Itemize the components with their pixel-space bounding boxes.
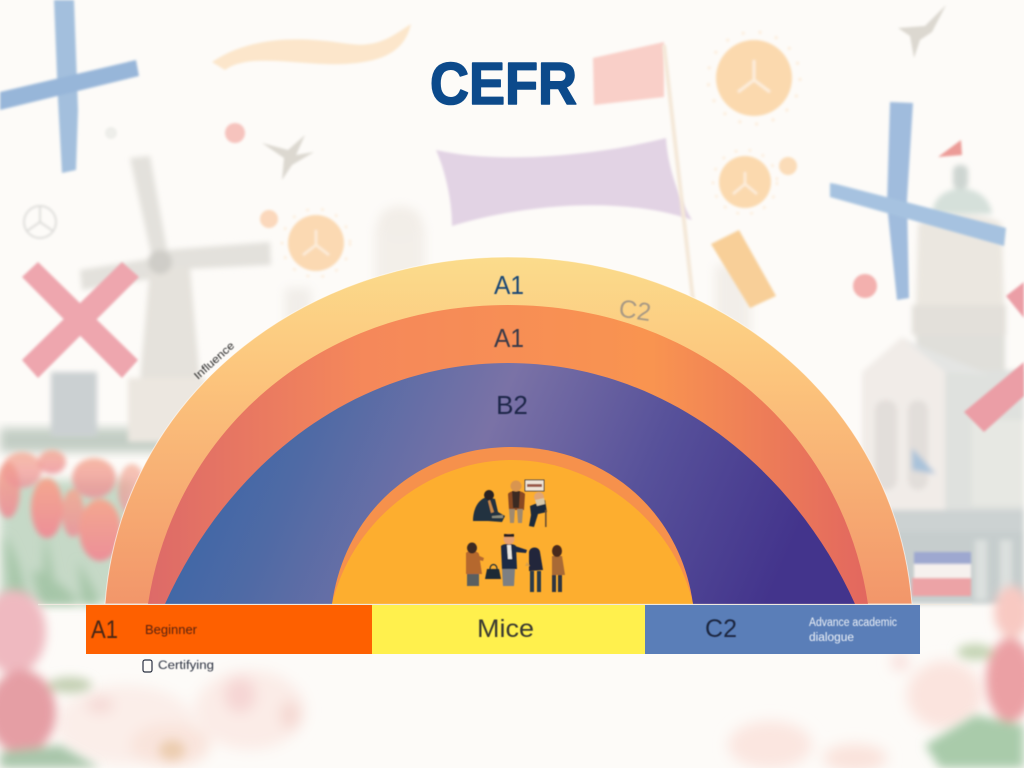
background: small emblem: [24, 206, 56, 238]
background: far treeline left: [0, 428, 165, 452]
woman right: [552, 545, 565, 592]
icon: legend marker: [143, 660, 152, 672]
segment: C2: [645, 605, 920, 654]
background: birds: [262, 5, 946, 180]
woman dark: [525, 548, 543, 592]
text: Advance academic dialogue: dialogue: [809, 632, 854, 644]
person seated left: [473, 490, 505, 522]
arc band: outer A1: [105, 257, 912, 604]
arc band: inner orange: [332, 447, 693, 604]
background: red cross left: [22, 262, 139, 378]
label: A1 second band: A1: [494, 323, 524, 353]
background: flag pole: [664, 45, 693, 300]
woman left: [466, 542, 484, 586]
background: windmill left: [51, 156, 271, 442]
background: lilac banner: [436, 138, 692, 226]
text: Beginner: Beginner: [145, 623, 197, 637]
background: ribbon top: [212, 24, 411, 70]
title: CEFR: CEFR: [430, 51, 577, 117]
background: distant towers: [285, 206, 751, 340]
people illustration: [466, 480, 565, 592]
person standing middle: [508, 480, 525, 523]
background: suns and dots: [105, 32, 877, 298]
label: C2 on outer band: C2: [617, 295, 653, 327]
segment: A1 Beginner: [86, 605, 372, 654]
background: blue windmill top left: [0, 0, 139, 173]
background: right building: [862, 337, 1024, 604]
background: tulip field left: [0, 450, 146, 604]
label: B2: B2: [496, 390, 528, 420]
legend: Certifying: [143, 660, 214, 672]
semicircle chart: [105, 257, 912, 604]
flip chart: [525, 480, 544, 491]
background: tag: [711, 230, 776, 308]
text: Advance academic dialogue: Advance academic: [809, 617, 897, 629]
background: small flag right: [912, 140, 971, 596]
standing group: [466, 534, 565, 592]
background: flag pink: [593, 42, 664, 105]
text: Certifying: Certifying: [158, 660, 214, 672]
label: A1 outer: A1: [494, 270, 524, 300]
text: Mice: Mice: [477, 615, 534, 643]
text: C2: C2: [705, 615, 737, 643]
text: Advance academic dialogue: [809, 617, 897, 644]
background: flowers bottom left: [0, 590, 305, 768]
bag: [485, 564, 501, 579]
background: red cross right: [964, 282, 1024, 432]
arc band: second A1: [148, 305, 868, 604]
background: gray tower left: [51, 372, 97, 436]
level bar: [86, 605, 920, 654]
seated group: [473, 480, 547, 527]
man centre: [501, 534, 527, 586]
text: A1: A1: [91, 616, 118, 644]
arc band: B2: [165, 363, 855, 604]
label: Influence along arc: Influence: [192, 340, 237, 382]
person seated right: [529, 492, 547, 527]
segment: Mice: [372, 605, 645, 654]
background: blue windmill right: [830, 102, 1006, 300]
background: right tower and dome: [912, 165, 1006, 400]
arc band: inner yellow: [332, 460, 693, 604]
baseline: [38, 604, 972, 606]
background: flowers bottom right: [728, 586, 1024, 768]
